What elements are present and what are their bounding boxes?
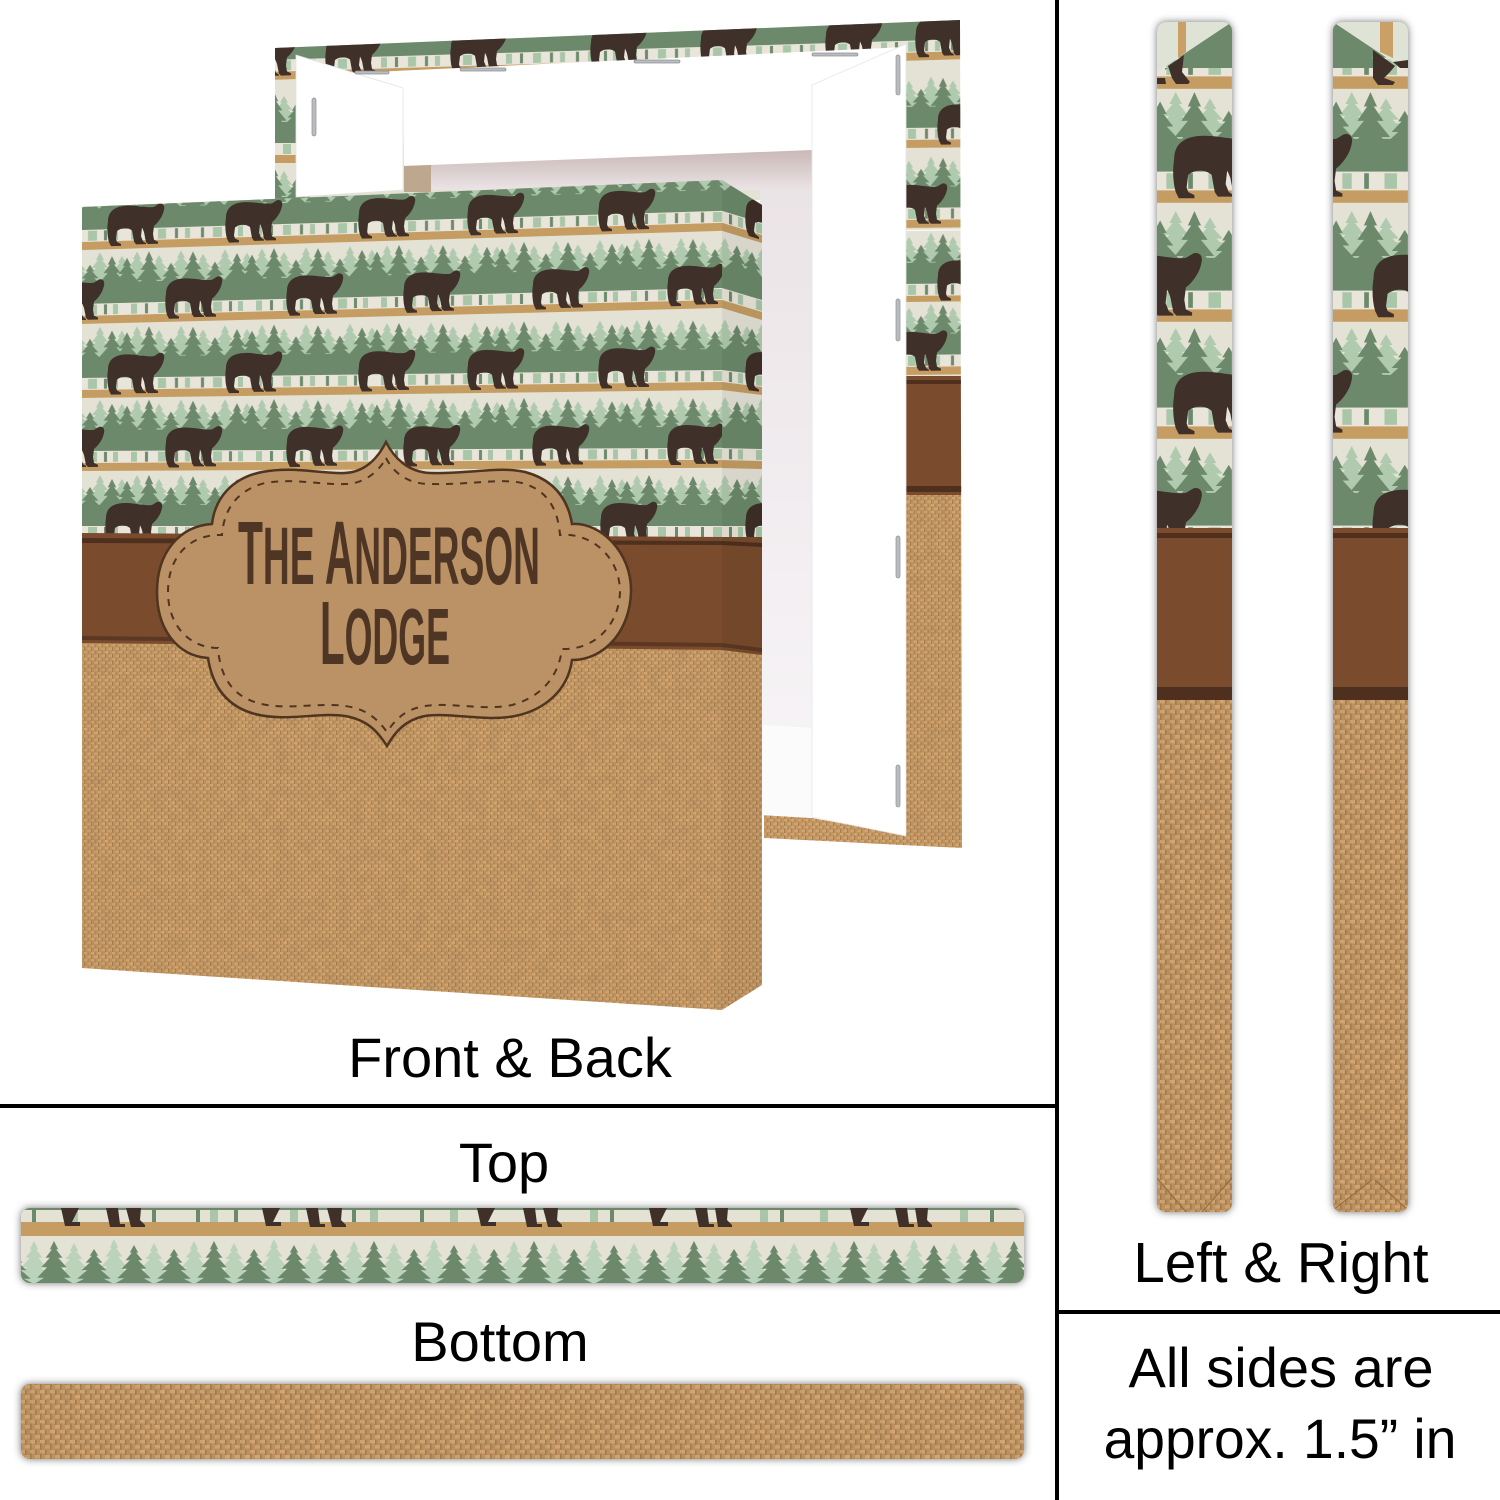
panel: left side strip	[1151, 16, 1238, 1218]
top white flap	[330, 47, 906, 168]
bear row 1	[82, 180, 722, 250]
side face	[722, 180, 762, 1010]
caption: Bottom: Bottom	[411, 1310, 589, 1373]
bear legs	[61, 1208, 932, 1227]
bear row 5	[82, 475, 722, 537]
inner canvas recess	[404, 150, 812, 728]
burlap bottom fold	[764, 815, 962, 848]
label plaque: LODGE	[320, 584, 450, 684]
panel: front canvas box	[82, 180, 762, 1010]
caption: all sides note: approx. 1.5” in	[1104, 1408, 1456, 1470]
brown band	[82, 533, 722, 650]
caption: Front & Back: Front & Back	[348, 1026, 673, 1089]
label plaque	[157, 442, 631, 746]
caption: Top: Top	[459, 1131, 549, 1194]
caption: all sides note: All sides are	[1128, 1336, 1434, 1399]
bear row 3	[82, 317, 722, 400]
panel: back of canvas	[275, 20, 962, 848]
left white flap	[296, 55, 403, 197]
right white flap	[812, 44, 906, 836]
back wrapped pattern border	[275, 20, 962, 848]
lower white panel	[760, 725, 812, 818]
folded corner right	[1333, 22, 1408, 72]
panel: right side strip	[1327, 16, 1414, 1218]
folded corner	[1157, 22, 1232, 72]
front face	[47, 158, 724, 1020]
label text: THE ANDERSON	[238, 504, 540, 604]
caption: Left & Right: Left & Right	[1133, 1231, 1429, 1294]
burlap grain	[82, 640, 722, 1020]
panel: bottom strip	[21, 1384, 1024, 1459]
bear row 4	[82, 397, 722, 471]
bear row 2	[82, 238, 722, 324]
panel: top strip	[21, 1208, 1024, 1283]
pattern backing	[88, 180, 722, 473]
wooden bar	[404, 165, 431, 192]
staples	[312, 53, 900, 807]
